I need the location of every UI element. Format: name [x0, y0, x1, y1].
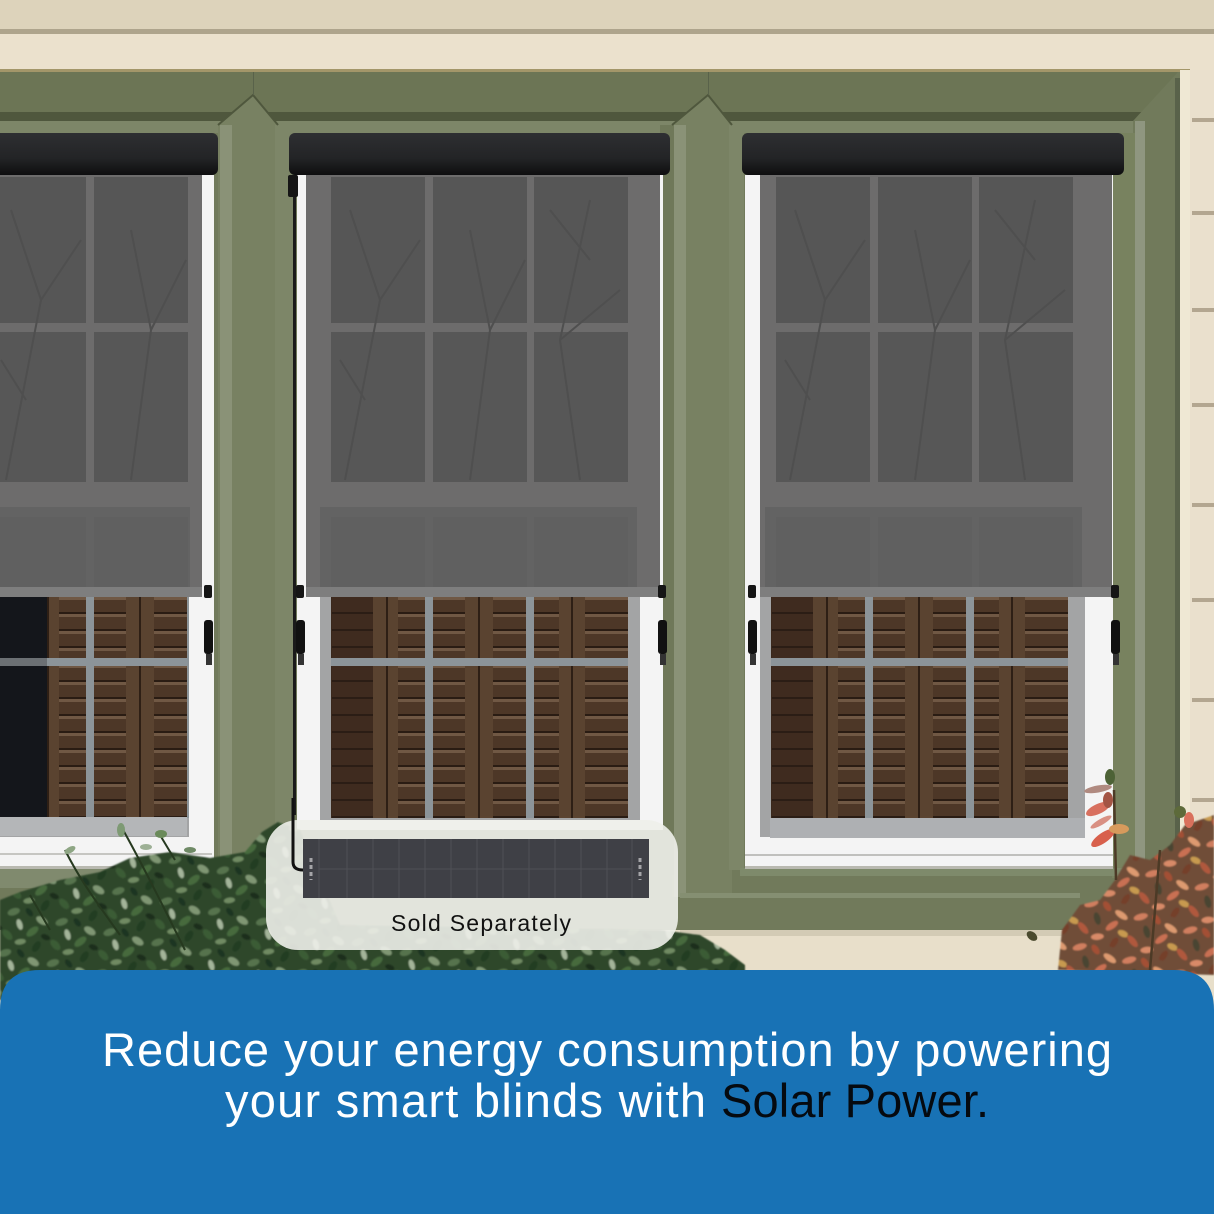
right jamb	[1133, 72, 1178, 880]
green window frame	[0, 72, 1180, 930]
right window	[742, 133, 1124, 869]
left window	[0, 133, 218, 869]
green bush	[0, 822, 745, 1000]
icon: solar cable	[293, 798, 303, 870]
callout background	[266, 820, 678, 950]
roller: right	[742, 133, 1124, 175]
left mullion	[218, 95, 278, 887]
roller: left	[0, 133, 218, 175]
banner text: your smart blinds with	[225, 1074, 706, 1127]
icon: solar panel	[303, 839, 649, 898]
centre mullion	[672, 95, 732, 897]
callout: sold separately	[266, 798, 678, 950]
centre window	[288, 133, 670, 830]
sold separately label: Sold Separately	[391, 910, 572, 936]
banner text	[102, 1023, 1112, 1127]
orange bush	[1025, 769, 1214, 975]
banner text: Reduce your energy consumption by powering	[102, 1023, 1112, 1076]
roller: centre	[289, 133, 670, 175]
banner	[0, 970, 1214, 1214]
banner background	[0, 970, 1214, 1214]
banner text: Solar Power.	[721, 1074, 989, 1127]
